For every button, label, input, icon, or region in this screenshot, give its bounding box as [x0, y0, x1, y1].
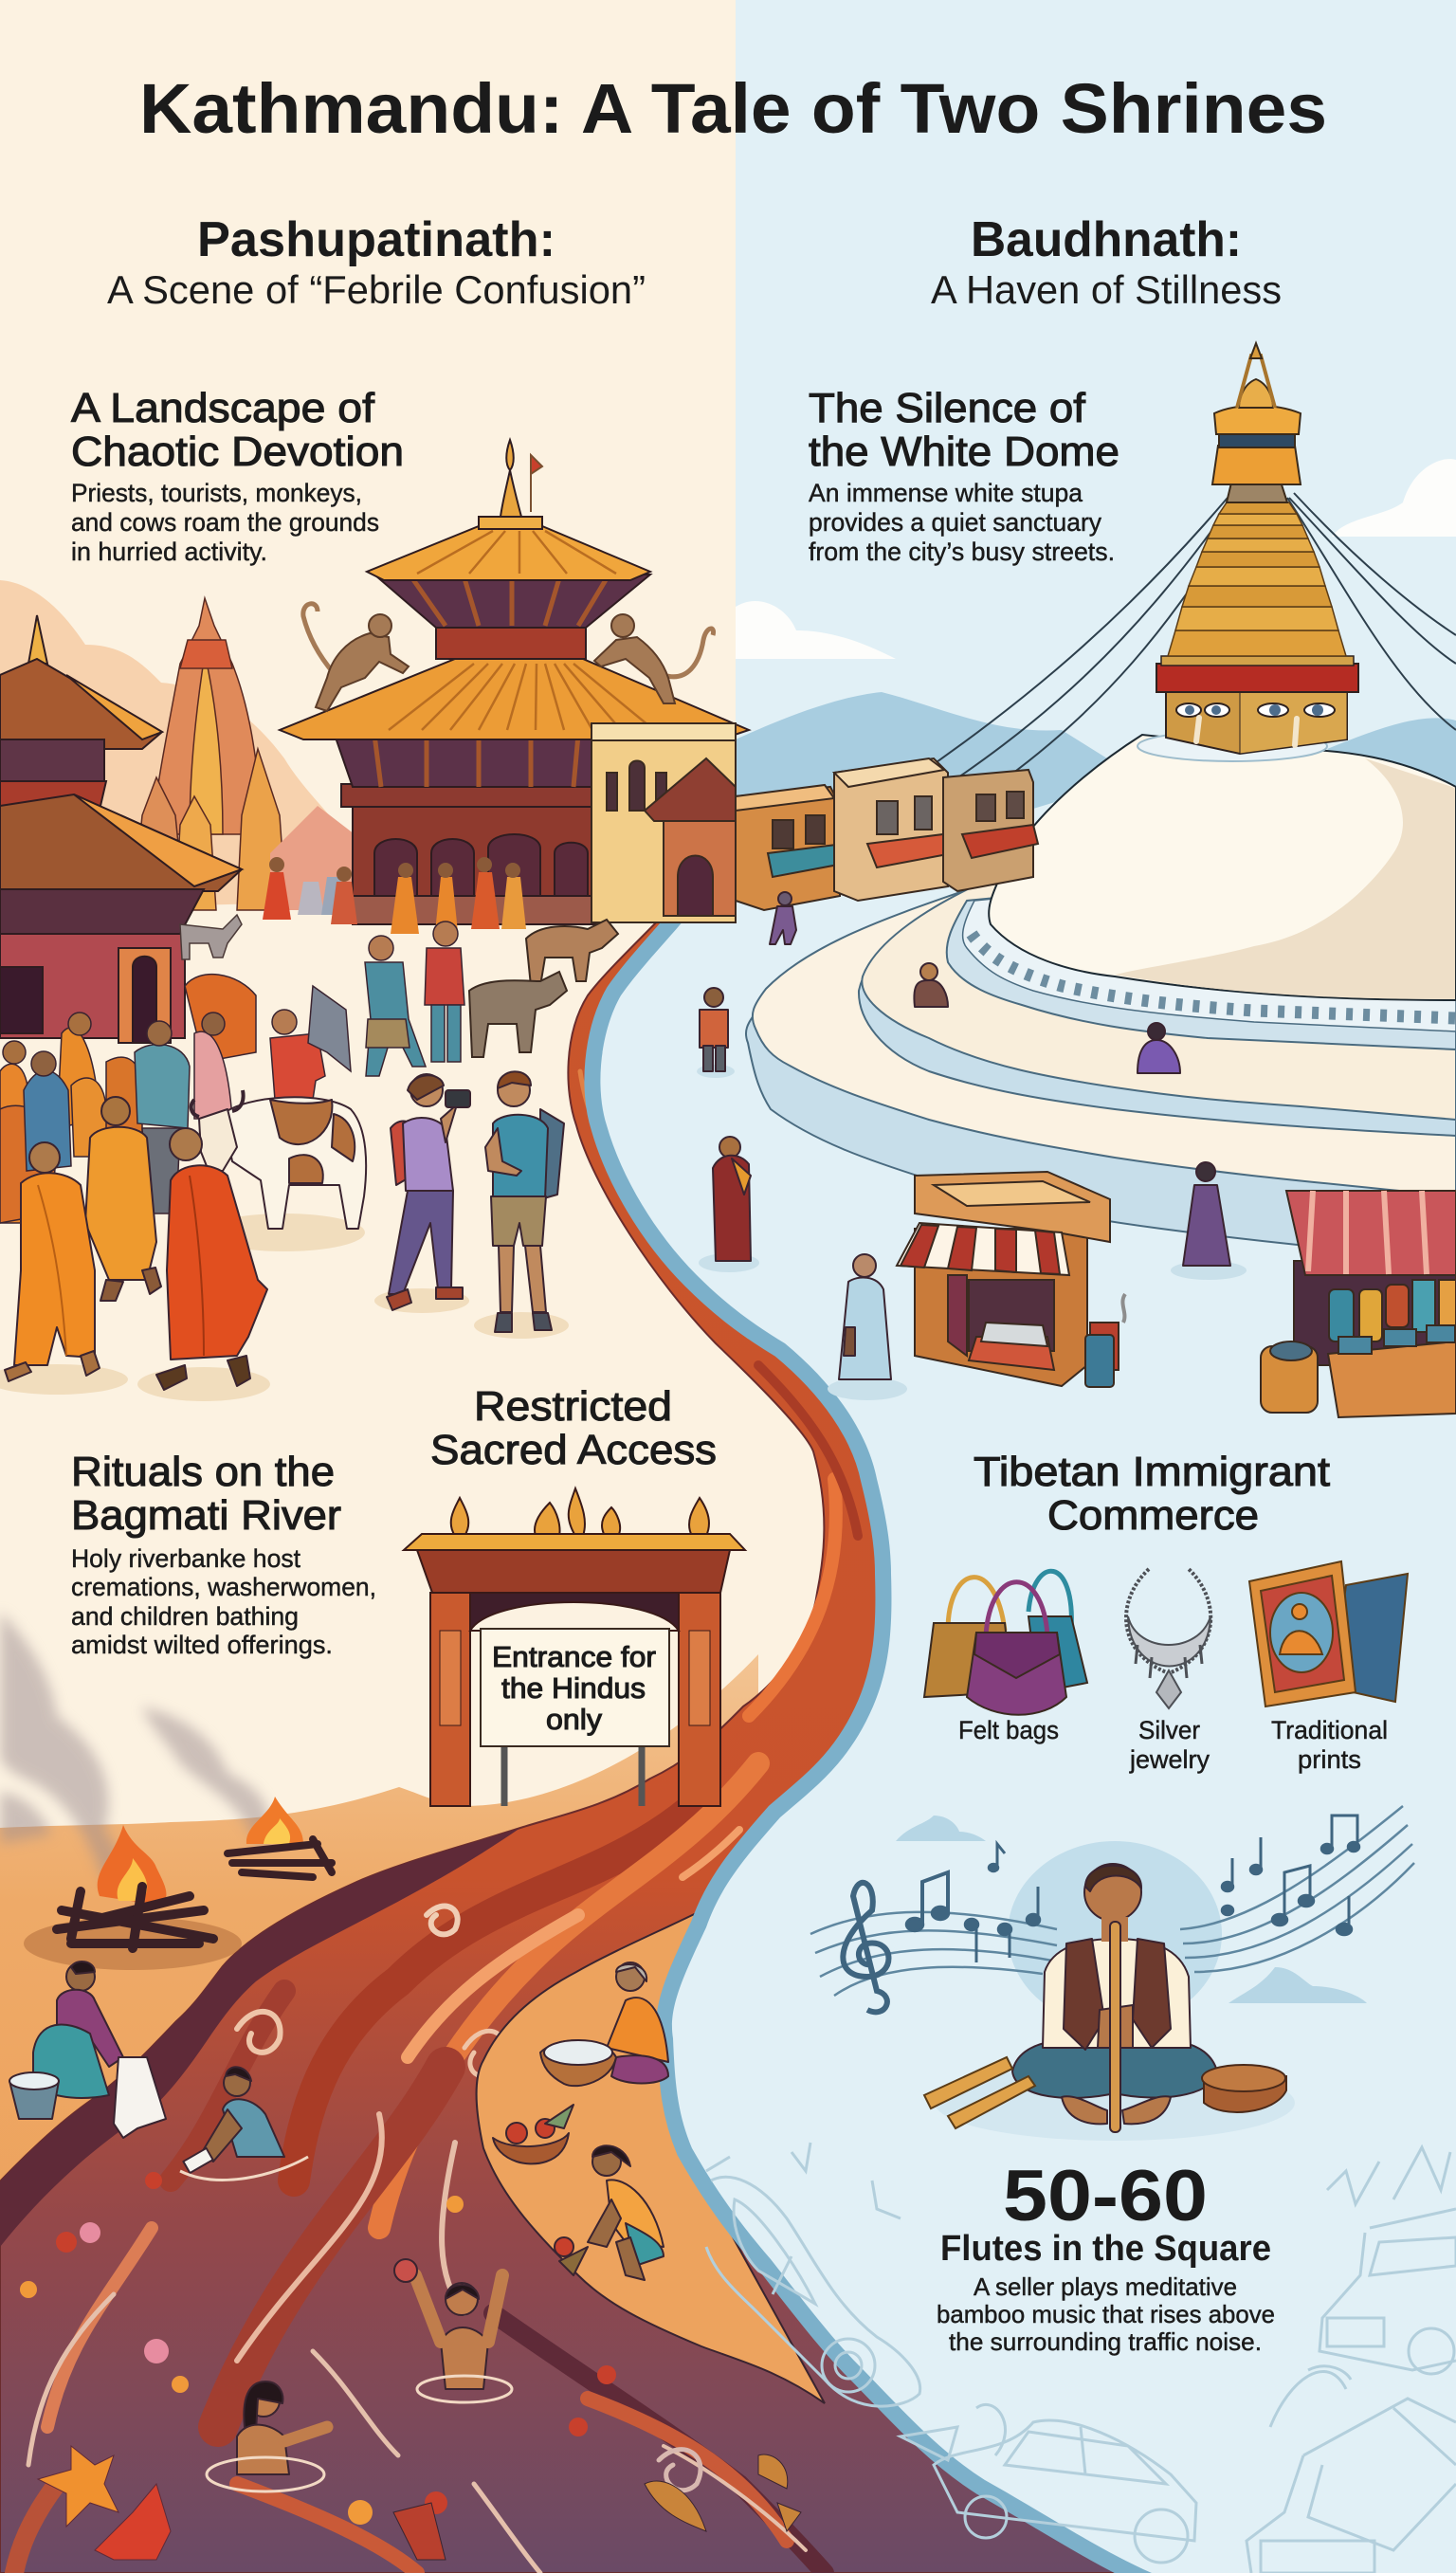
heading: Pashupatinath — [107, 212, 646, 312]
text block: rituals on the Bagmati: amidst wilted offerings. — [71, 1631, 333, 1659]
finial — [500, 440, 521, 517]
flutist torso — [1043, 1939, 1191, 2048]
heading: restricted sacred access: Restricted — [474, 1383, 672, 1430]
orange cluster — [185, 975, 256, 1062]
stat: 50-60 flutes: 50-60 — [1003, 2156, 1208, 2236]
ground sand and hills on the left bank — [0, 1654, 758, 2275]
old woman in pale blue — [839, 1254, 891, 1379]
traffic sketch: jeep corner — [901, 2366, 1456, 2573]
caption: silver jewelry: Silver — [1138, 1716, 1200, 1744]
crowd behind: distant pilgrims — [263, 857, 526, 934]
man with blue pack — [365, 962, 426, 1076]
tourist with backpack — [485, 1071, 564, 1332]
walking visitors mid ground — [185, 922, 464, 1119]
floating flowers and offerings — [20, 2172, 801, 2560]
platform — [353, 896, 599, 924]
gate lintel — [417, 1550, 730, 1593]
golden stepped spire — [1168, 502, 1346, 656]
title: Kathmandu: A Tale of Two Shrines — [139, 69, 1327, 148]
shikhara temple — [133, 598, 286, 910]
seated meditator brown — [914, 963, 948, 1007]
heading: Tibetan commerce — [974, 1449, 1330, 1539]
text block: rituals on the Bagmati: Rituals on the — [71, 1449, 335, 1495]
caption: felt bags: Felt bags — [958, 1716, 1059, 1744]
text block: white dome: the White Dome — [809, 429, 1119, 475]
clouds near flutist — [896, 1816, 1367, 2003]
drum — [1202, 2065, 1286, 2112]
middle tier wall — [859, 853, 1456, 1136]
monk in orange robe, front left — [5, 1142, 100, 1381]
flutist feet — [1062, 2096, 1171, 2124]
text block: rituals on the Bagmati: Holy riverbanke host — [71, 1544, 300, 1573]
flutist head — [1084, 1864, 1141, 1921]
pilgrim in purple — [1183, 1162, 1230, 1266]
boy in river waving — [394, 2259, 512, 2402]
girl in river — [207, 2381, 327, 2491]
red band — [1156, 656, 1358, 692]
tourist with camera — [387, 1074, 470, 1310]
man in red — [425, 948, 464, 1005]
lower roof — [280, 659, 749, 739]
text block: chaotic devotion: in hurried activity. — [71, 538, 267, 566]
text block: white dome — [809, 385, 1119, 566]
lower eave — [335, 735, 607, 787]
traffic sketch: sedan bottom — [934, 2420, 1196, 2563]
gate finials — [451, 1488, 709, 1536]
caption: traditional prints: Traditional — [1271, 1716, 1388, 1744]
text block: rituals on the Bagmati: cremations, washerwomen, — [71, 1573, 376, 1601]
base tier wall — [746, 853, 1456, 1259]
flutist legs — [1012, 2040, 1217, 2098]
dark river edge — [0, 1828, 520, 2247]
heading: Tibetan commerce: Tibetan Immigrant — [974, 1449, 1330, 1495]
heading: restricted sacred access — [430, 1383, 717, 1473]
upper roof — [367, 526, 650, 580]
main pagoda — [280, 440, 749, 924]
text block: rituals on the Bagmati: Bagmati River — [71, 1492, 341, 1539]
cremation pyre, small — [228, 1797, 332, 1877]
mountains behind stupa — [736, 692, 1456, 834]
caption: silver jewelry — [1129, 1716, 1210, 1774]
stat: 50-60 flutes: Flutes in the Square — [940, 2229, 1271, 2269]
bamboo flutes on ground — [924, 2057, 1035, 2128]
girl placing offerings — [555, 2145, 664, 2280]
caption: silver jewelry: jewelry — [1129, 1745, 1210, 1774]
caption: traditional prints: prints — [1298, 1745, 1361, 1774]
stat: 50-60 flutes: bamboo music that rises above — [937, 2300, 1275, 2328]
monk in red robe, front — [156, 1128, 267, 1390]
text block: chaotic devotion — [71, 385, 404, 566]
heading: Baudhnath: A Haven of Stillness — [931, 267, 1282, 312]
right sand bank — [476, 1882, 825, 2403]
seated meditator purple — [1138, 1023, 1180, 1073]
brown cow — [526, 920, 618, 986]
clouds behind stupa — [736, 459, 1456, 659]
text block: white dome: provides a quiet sanctuary — [809, 508, 1101, 537]
offering bowl — [493, 2105, 573, 2163]
heading: Baudhnath — [931, 212, 1282, 312]
gate: restricted entry — [404, 1488, 745, 1806]
flutist hands — [1098, 2005, 1133, 2048]
dome base collar — [1138, 731, 1327, 761]
gray cow distant — [180, 915, 242, 959]
Pashupatinath temple complex — [0, 440, 749, 1043]
lower wall — [353, 806, 594, 901]
text block: chaotic devotion: Chaotic Devotion — [71, 429, 404, 475]
prints icon — [1249, 1561, 1408, 1706]
distant pink building — [270, 806, 379, 910]
gate inner arch — [470, 1602, 679, 1631]
blue river border — [600, 844, 1152, 2573]
stat: 50-60 flutes — [937, 2156, 1275, 2356]
sign posts — [504, 1744, 642, 1806]
text block: white dome: from the city’s busy streets. — [809, 538, 1115, 566]
right-side monk in maroon robe — [713, 1137, 751, 1261]
text block: white dome: An immense white stupa — [809, 479, 1083, 507]
necklace icon — [1126, 1569, 1210, 1708]
big spotted cow — [191, 1090, 366, 1229]
dome — [989, 735, 1456, 1000]
heading: Baudhnath: Baudhnath: — [971, 212, 1242, 267]
monkey on the roof, right — [594, 614, 714, 703]
heading: Pashupatinath: A Scene of “Febrile Confusion” — [107, 267, 646, 312]
flute — [1110, 1922, 1120, 2132]
gate roof — [404, 1534, 745, 1550]
sign board — [481, 1629, 669, 1746]
text block: chaotic devotion: Priests, tourists, monkeys, — [71, 479, 362, 507]
right-side walker shadows — [697, 1065, 1247, 1400]
traffic sketch: truck right — [1320, 2147, 1456, 2374]
crowd in front of the left pagoda — [0, 1013, 232, 1223]
smoke from cremation pyres — [0, 1612, 271, 1887]
sign text: the Hindus — [501, 1671, 646, 1705]
musical staves left with treble clef — [810, 1844, 1057, 2012]
bucket — [9, 2072, 59, 2119]
heading: Pashupatinath: Pashupatinath: — [197, 212, 555, 267]
gate pillars — [430, 1593, 470, 1806]
musical staves right — [1180, 1806, 1414, 1972]
dancing figure — [308, 986, 351, 1071]
flag — [531, 455, 542, 512]
heading: restricted sacred access: Sacred Access — [430, 1427, 717, 1473]
flutist — [1012, 1864, 1217, 2132]
washerwoman on bank — [33, 1962, 166, 2138]
harmika cube with eyes — [1166, 691, 1347, 754]
text block: chaotic devotion: A Landscape of — [71, 385, 375, 431]
river flow streaks — [14, 1071, 858, 2573]
flutist halo and shadow — [935, 1841, 1295, 2141]
sign text: Entrance for — [492, 1640, 656, 1673]
yellow building — [592, 723, 736, 922]
left pagoda — [0, 615, 242, 1043]
caption: traditional prints — [1271, 1716, 1388, 1774]
river: Bagmati — [0, 834, 1232, 2573]
monk in orange robe, behind — [85, 1097, 161, 1301]
ring windows — [972, 934, 1456, 1018]
stupa of Baudhnath — [746, 343, 1456, 1259]
stat: 50-60 flutes: the surrounding traffic noise. — [949, 2327, 1262, 2356]
text block: chaotic devotion: and cows roam the grounds — [71, 508, 379, 537]
washer in water — [180, 2067, 308, 2180]
right-side walker: purple small — [770, 892, 796, 944]
upper eave — [374, 575, 650, 628]
market stall two — [1261, 1191, 1456, 1417]
upper ring — [947, 853, 1456, 1049]
sign text — [492, 1640, 656, 1736]
lantern drum and finial — [1212, 343, 1301, 502]
cremation pyre, large — [24, 1825, 242, 1970]
text block: rituals on the Bagmati — [71, 1449, 376, 1659]
prayer flag lines — [858, 493, 1456, 815]
market stall one — [897, 1172, 1110, 1386]
bags icon — [924, 1571, 1087, 1715]
background hill behind left temples — [0, 580, 379, 910]
base tier cream — [753, 853, 1456, 1196]
text block: white dome: The Silence of — [809, 385, 1086, 431]
stall lanterns and cans — [1085, 1294, 1125, 1387]
traffic sketch: sedan left — [706, 2143, 920, 2406]
sign text: only — [546, 1703, 603, 1736]
heading: Tibetan commerce: Commerce — [1047, 1492, 1259, 1539]
gesturing man — [270, 1033, 325, 1100]
text block: rituals on the Bagmati: and children bathing — [71, 1602, 299, 1631]
background: right cool panel — [600, 0, 1456, 2573]
middle tier cream — [862, 853, 1456, 1120]
middle band — [436, 626, 586, 659]
gray-brown cow — [469, 972, 567, 1057]
stat: 50-60 flutes: A seller plays meditative — [974, 2272, 1237, 2301]
monkey on the roof, left — [303, 604, 409, 711]
shop buildings behind river — [736, 758, 1038, 910]
right-side walker: orange shirt — [700, 988, 728, 1071]
old woman with washing bowl — [540, 1962, 668, 2086]
ground shadows under the crowd — [0, 1214, 569, 1401]
